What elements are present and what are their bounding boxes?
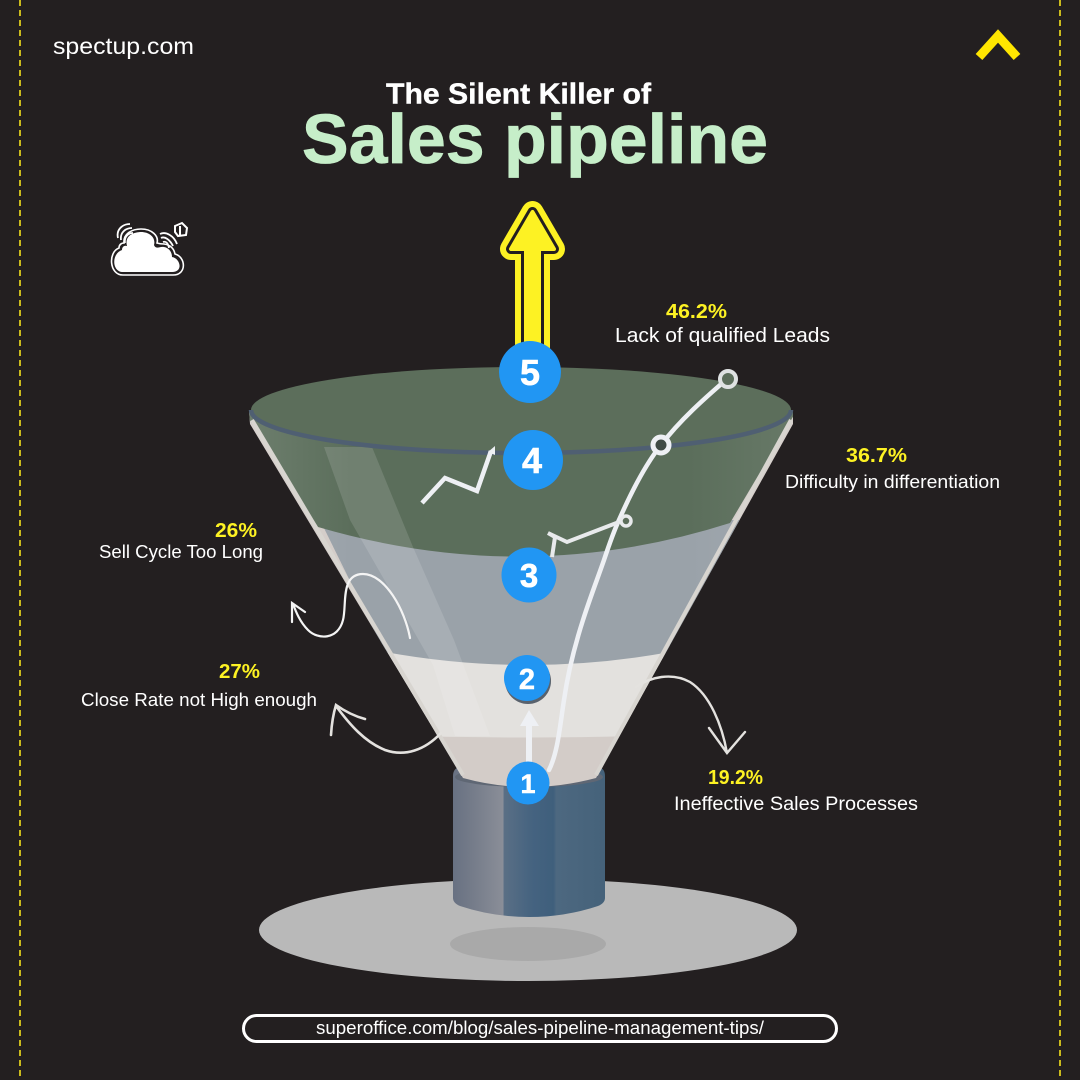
step 3: 3 bbox=[520, 557, 538, 594]
label: close rate: 27% bbox=[219, 661, 260, 683]
layer: green band bbox=[240, 405, 800, 557]
label: sell cycle too long: 26% bbox=[215, 520, 257, 542]
title: The Silent Killer of bbox=[386, 78, 651, 110]
step 1: 1 bbox=[520, 769, 536, 799]
label: lack of qualified leads bbox=[615, 301, 830, 347]
label: difficulty in differentiation bbox=[785, 445, 1000, 492]
base platform bbox=[259, 879, 797, 981]
step 2 bbox=[504, 655, 551, 704]
arrow: stage 1 to 2 bbox=[520, 710, 539, 768]
chart line: rising curve bbox=[549, 371, 736, 770]
glass highlight bbox=[324, 447, 462, 662]
arrow: yellow upward bbox=[511, 212, 554, 347]
step 5: 5 bbox=[520, 352, 540, 393]
step 5 bbox=[499, 341, 561, 403]
label: lack of qualified leads: 46.2% bbox=[666, 301, 727, 323]
label: close rate bbox=[81, 661, 317, 710]
funnel rim opening bbox=[251, 367, 791, 453]
arrow: sell cycle curve bbox=[292, 574, 410, 638]
label: ineffective sales processes bbox=[674, 767, 918, 815]
label: sell cycle too long: Sell Cycle Too Long bbox=[99, 542, 263, 562]
label: close rate: Close Rate not High enough bbox=[81, 690, 317, 710]
label: sell cycle too long bbox=[99, 520, 263, 562]
layer: off-white band bbox=[380, 640, 670, 738]
funnel stem cylinder bbox=[453, 767, 605, 917]
source link pill bbox=[244, 1016, 836, 1042]
layer: grey band bbox=[320, 520, 740, 665]
step 3 bbox=[502, 548, 556, 602]
label: ineffective sales processes: Ineffective Sales Processes bbox=[674, 794, 918, 815]
label: ineffective sales processes: 19.2% bbox=[708, 767, 763, 789]
chart line: small zigzag 4 bbox=[422, 451, 491, 503]
label: difficulty in differentiation: Difficulty in differentiation bbox=[785, 471, 1000, 492]
label: lack of qualified leads: Lack of qualified Leads bbox=[615, 325, 830, 347]
step 4: 4 bbox=[522, 440, 542, 481]
icon: cloud with signals bbox=[112, 223, 187, 275]
step 4 bbox=[503, 430, 563, 490]
step 2: 2 bbox=[519, 664, 535, 696]
chart line: small zigzag 3 bbox=[548, 516, 631, 557]
label: difficulty in differentiation: 36.7% bbox=[846, 445, 907, 467]
icon: small zigzag 4 arrow tip bbox=[488, 446, 495, 455]
funnel glass edges bbox=[252, 420, 791, 775]
funnel bbox=[240, 367, 800, 800]
title: Sales pipeline bbox=[302, 100, 768, 178]
arrow: ineffective processes curve bbox=[636, 677, 745, 753]
step 1 bbox=[506, 762, 550, 804]
source link pill: superoffice.com/blog/sales-pipeline-management-tips/ bbox=[316, 1018, 764, 1038]
brand: spectup.com: spectup.com bbox=[53, 33, 194, 59]
icon: yellow chevron bbox=[979, 36, 1017, 57]
arrow: close rate curve bbox=[331, 705, 441, 753]
